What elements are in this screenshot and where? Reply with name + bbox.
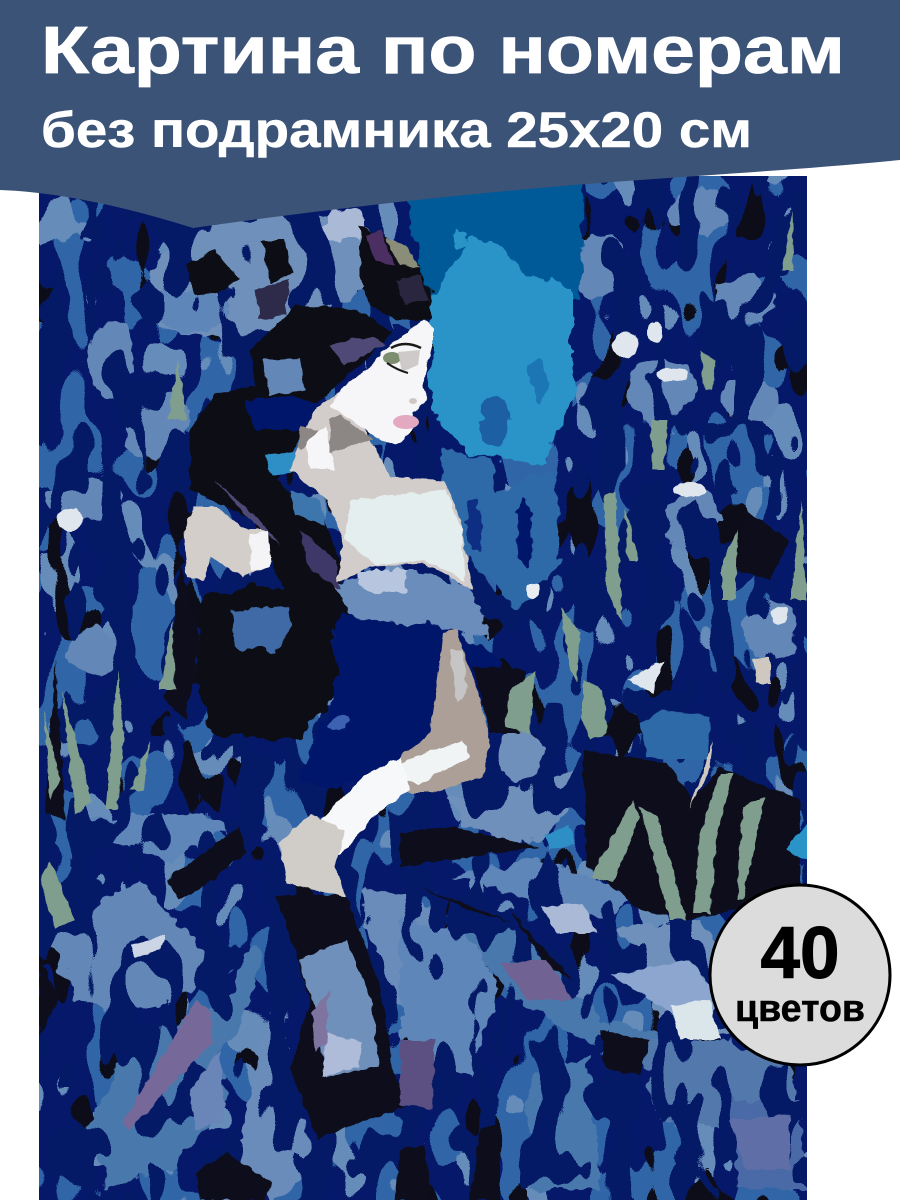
sky behind the woman: [405, 180, 585, 610]
dress bodice: [300, 565, 542, 790]
iris flowers: [47, 184, 796, 674]
background irises mottling: [39, 176, 807, 1200]
header banner: [0, 0, 900, 228]
iris leaves: [40, 210, 806, 930]
badge: 40 colours: 40: [760, 913, 840, 994]
badge: 40 colours: [710, 885, 890, 1065]
flower crown: [150, 210, 385, 340]
skirt accents: [122, 825, 790, 1170]
title: Картина по номерам: [41, 13, 845, 88]
subtitle: без подрамника 25х20 см: [41, 102, 752, 158]
painting: woman in a blue dress among irises: [39, 176, 807, 1200]
dark folds of the skirt: [39, 510, 800, 1200]
hair: [185, 225, 440, 610]
skirt: [42, 773, 805, 1200]
skin: face, shoulders, arms: [183, 320, 490, 897]
facial features: [383, 344, 421, 429]
navy paint dabs: [39, 176, 807, 1200]
iris flower, sky dab and petals: [57, 322, 807, 860]
badge: 40 colours: цветов: [735, 988, 865, 1030]
